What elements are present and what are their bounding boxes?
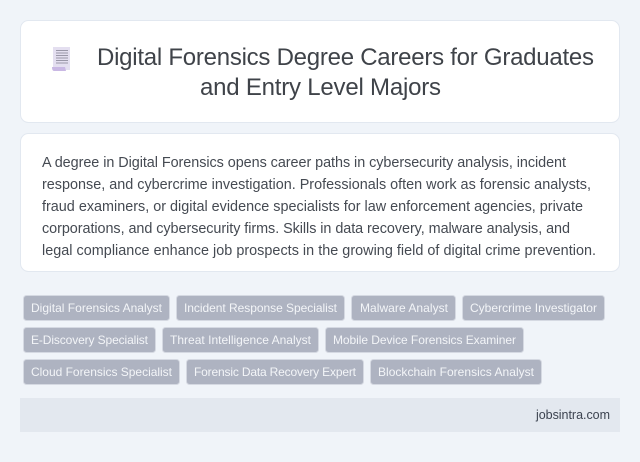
- description text: legal compliance enhance job prospects in the growing field of digital crime prevention.: [42, 243, 596, 259]
- tag: Blockchain Forensics Analyst: Blockchain Forensics Analyst: [378, 365, 535, 379]
- tag: Digital Forensics Analyst: [24, 296, 170, 320]
- tag: Threat Intelligence Analyst: [162, 328, 318, 352]
- tag: Cloud Forensics Specialist: Cloud Forensics Specialist: [31, 365, 173, 379]
- icon: document: [52, 47, 70, 71]
- tag: Forensic Data Recovery Expert: [186, 360, 364, 384]
- tag: Mobile Device Forensics Examiner: Mobile Device Forensics Examiner: [333, 333, 516, 347]
- tag: Cloud Forensics Specialist: [24, 360, 180, 384]
- title text: [97, 44, 594, 101]
- tag: E-Discovery Specialist: E-Discovery Specialist: [31, 333, 149, 347]
- tag: E-Discovery Specialist: [24, 328, 156, 352]
- tag: Malware Analyst: [352, 296, 456, 320]
- tag: Incident Response Specialist: [176, 296, 344, 320]
- tag: Incident Response Specialist: Incident Response Specialist: [184, 301, 338, 315]
- description text: fraud examiners, or digital evidence specialists for law enforcement agencies, private: [42, 199, 583, 215]
- tag: Mobile Device Forensics Examiner: [326, 328, 524, 352]
- tag: Threat Intelligence Analyst: Threat Intelligence Analyst: [170, 333, 312, 347]
- panel: title: [20, 20, 620, 122]
- tag: Blockchain Forensics Analyst: [370, 360, 542, 384]
- tag: Cybercrime Investigator: [462, 296, 604, 320]
- footer source text: jobsintra.com: [535, 408, 610, 422]
- description text: corporations, and cybersecurity firms. Skills in data recovery, malware analysis, and: [42, 221, 570, 237]
- tag: Forensic Data Recovery Expert: Forensic Data Recovery Expert: [194, 365, 357, 379]
- tag: Cybercrime Investigator: Cybercrime Investigator: [470, 301, 597, 315]
- title text: Digital Forensics Degree Careers for Graduates: [97, 44, 594, 71]
- panel: description: [20, 134, 620, 272]
- title text: and Entry Level Majors: [200, 74, 441, 101]
- description text: response, and cybercrime investigation. Professionals often work as forensic analysts,: [42, 177, 591, 193]
- description text: [42, 155, 596, 259]
- tag: Malware Analyst: Malware Analyst: [360, 301, 449, 315]
- tag: Digital Forensics Analyst: Digital Forensics Analyst: [31, 301, 163, 315]
- job tags: [24, 296, 604, 384]
- footer bar: [20, 398, 620, 432]
- description text: A degree in Digital Forensics opens career paths in cybersecurity analysis, incident: [42, 155, 566, 171]
